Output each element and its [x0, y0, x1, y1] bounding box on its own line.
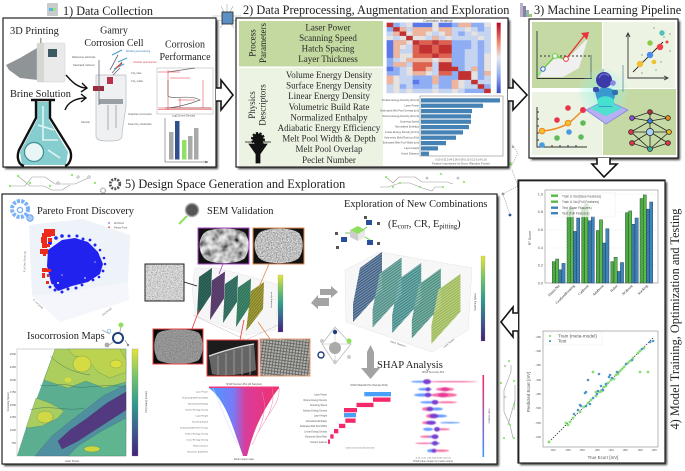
diagram: corrosion cell: Counter and counter [133, 60, 157, 64]
circuit decoration: left of panel 4 [500, 360, 515, 439]
heading 4: 4) Model Training, Optimization and Testing [668, 209, 682, 429]
axis labels: -450 [535, 392, 541, 396]
icon: pareto gear [12, 201, 33, 221]
axis labels: -350 [535, 363, 541, 367]
chart: polarisation curve: Log(Current Density) [172, 114, 195, 118]
chart: feature importance: Layer Height [404, 146, 419, 150]
heading: SHAP analysis: SHAP Analysis [377, 360, 443, 371]
heading: Isocorrosion: Isocorrosion Maps [27, 331, 105, 342]
chart: isocorrosion contour map: 2250 [10, 365, 16, 369]
label: response targets: pitting [439, 224, 458, 230]
illustration: robot on platform [579, 65, 628, 124]
block: physics descriptors: Physics [247, 91, 257, 119]
chart: SHAP waterfall plot: Surface Energy Density [303, 409, 328, 412]
heading 2: 2) Data Preprocessing, Augmentation and Exploration [243, 3, 509, 17]
chart: central 3D design slices [192, 268, 283, 340]
arrow: printing to cell [66, 75, 87, 92]
chart: SHAP decision plot: Surface Energy Density [185, 432, 209, 436]
chart: SHAP decision plot: Laser Power [196, 390, 208, 394]
axis labels: -350 [622, 448, 628, 452]
heading 5: 5) Design Space Generation and Exploration [125, 177, 345, 191]
chart: SHAP decision plot: Model output value [234, 458, 255, 461]
label: corrosion performance: Corrosion [165, 40, 205, 50]
chart: isocorrosion contour map [6, 349, 148, 463]
chart: isocorrosion contour map: 750 [11, 441, 16, 445]
chart: SHAP decision plot: Volumetric Build Rate [187, 450, 209, 454]
chart: SHAP waterfall plot: Volume Energy Density [303, 399, 328, 402]
icon: data sheet [47, 3, 58, 16]
chart: SHAP waterfall plot [300, 384, 391, 450]
axis labels: AdaBoost [592, 284, 605, 297]
chart: SHAP decision plot: Normalized Enthalpy [188, 402, 209, 406]
chart: isocorrosion contour map: CR [mmpy] (mean) [144, 391, 148, 413]
icon: magnifier [179, 204, 198, 224]
legend: Train & Val (Base Features) [562, 194, 601, 198]
axis labels: Predicted Ecorr [mV] [526, 372, 531, 412]
chart: SHAP decision plot: Hatch Distance [193, 444, 209, 448]
chart: performance bars [165, 118, 208, 163]
legend: Test (Base Features) [562, 206, 592, 210]
arrow: brine to cell [65, 94, 86, 110]
axis labels: -600 [535, 435, 541, 439]
label: response targets: corr [398, 224, 409, 230]
label: response targets: , CR, E [409, 219, 439, 230]
chart: feature importance: Hatch Distance [401, 151, 420, 155]
chart: SHAP beeswarm plot: SHAP Summary Plot [422, 371, 444, 374]
chart: SHAP decision plot: Linear Energy Density [186, 438, 209, 442]
diagram: corrosion cell: Dual CO₂ inlet/outlet [128, 122, 152, 126]
diagram: corrosion cell [72, 49, 157, 141]
SEM image: red centre [207, 340, 258, 376]
axis labels: -450 [594, 448, 600, 452]
chart: isocorrosion contour map: 1500 [10, 403, 16, 407]
chart: exploration 3D slices: Scanning Speed [474, 293, 477, 311]
diagram: corrosion cell: Sample [81, 120, 90, 124]
chart: exploration 3D slices [345, 252, 485, 352]
quadrant: regression curve [532, 92, 602, 155]
circuit decoration: constellation above panel 4 [499, 145, 519, 216]
arrow: panel 4 to panel 5 [501, 307, 518, 337]
chart: SHAP waterfall plot: Normalized Enthalpy [306, 420, 328, 423]
block: physics descriptors: Melt Pool Overlap [296, 144, 363, 154]
SEM image: orange top [253, 228, 304, 264]
SEM image: red left [153, 329, 203, 364]
chart: SHAP waterfall plot: Scanning Speed [310, 405, 328, 407]
chart: SHAP beeswarm plot: Feature value [488, 408, 491, 423]
chart: SHAP decision plot: Volume Energy Density [185, 408, 209, 412]
chart: isocorrosion contour map: 2500 [10, 352, 16, 356]
chart: SHAP beeswarm plot: -0.15 -0.10 -0.05 0.00 0.05 0.10 0.15 [415, 458, 452, 460]
icon: connected cubes [335, 216, 380, 249]
axis labels: -550 [535, 421, 541, 425]
chart: isocorrosion contour map: 2000 [10, 378, 16, 382]
arrow: panel 1 to panel 2 [216, 80, 233, 110]
chart: feature importance: Volume Energy Density [J/mm3] [382, 114, 419, 118]
label: brine solution: Brine Solution [10, 89, 72, 100]
chart: SHAP decision plot: Scanning Speed [192, 422, 209, 424]
block: physics descriptors: Peclet Number [302, 155, 356, 165]
block: physics descriptors: Linear Energy Density [288, 91, 370, 101]
circuit decoration: right of heading 5 [380, 173, 465, 191]
block: process parameters: Hatch Spacing [302, 44, 355, 54]
block: process parameters: Parameters [258, 23, 268, 63]
axis labels: Stacking [637, 284, 649, 296]
panel 4: model training [518, 180, 667, 465]
chart: SHAP decision plot: Estimated Melt Pool Overlap [180, 426, 209, 430]
block: process parameters: Laser Power [305, 22, 351, 32]
chart: feature importance: Normalized Enthalpy [395, 125, 420, 129]
axis labels: 0.6 [538, 228, 543, 232]
block: physics descriptors: Descriptors [258, 84, 268, 126]
diagram: corrosion cell: Reference electrode [72, 55, 96, 59]
chart: feature importance: Estimated Melt Pool Overlap [um] [380, 109, 419, 113]
block: physics descriptors [239, 68, 383, 166]
image: printer machine [37, 38, 65, 82]
chart: feature importance: 0.00 0.02 0.04 0.06 0.08 0.10 0.12 0.14 0.16 [435, 158, 487, 162]
legend: Train & Val (Full Features) [562, 200, 599, 204]
chart: feature importance: Laser Power [404, 103, 419, 107]
quadrant: optimisation chart [532, 22, 602, 88]
axis labels: -500 [535, 406, 541, 410]
axis labels: 0.4 [538, 246, 543, 250]
heading 3: 3) Machine Learning Pipeline [534, 3, 682, 17]
arrow: down to SHAP plots [361, 345, 380, 379]
heading 1: 1) Data Collection [63, 4, 153, 18]
icon: molecule network [318, 327, 352, 364]
panel 1: data collection [3, 18, 218, 169]
axis labels: GradientBoosting [555, 284, 576, 305]
axis labels: -600 [550, 448, 556, 452]
heading: exploration: Exploration of New Combinations [344, 199, 487, 210]
diagram: corrosion cell: Graphite rod counter [128, 112, 152, 116]
chart: SHAP waterfall plot: Estimated Melt Pool Width [300, 425, 328, 428]
block: process parameters: Process [248, 29, 258, 57]
diagram: corrosion cell: CO₂ inlet [131, 71, 142, 75]
circuit decoration: left of heading 5 [9, 174, 96, 190]
label: response targets: ) [457, 219, 461, 230]
chart: SHAP waterfall plot: Laser Power [314, 394, 327, 396]
heatmap colour bar [497, 23, 501, 93]
arrow: panel 2 to panel 3 [508, 80, 527, 110]
chart: R2 score bars [528, 190, 658, 305]
axis labels: -300 [637, 448, 643, 452]
chart: feature importance: Scanning Speed [400, 119, 420, 123]
axis labels: 0.0 [538, 282, 543, 286]
legend: Train (meta-model) [558, 334, 597, 339]
axis labels: ElasticNet [547, 284, 561, 297]
legend [550, 193, 615, 217]
axis labels: -400 [608, 448, 614, 452]
legend: Test [558, 339, 567, 344]
chart: isocorrosion contour map: 1750 [10, 390, 16, 394]
colour bar [278, 275, 283, 332]
label: 3D printing: 3D Printing [10, 26, 59, 37]
axis labels: R² Score [528, 231, 532, 245]
colour bar [482, 375, 484, 457]
chart: SHAP waterfall plot: Linear Energy Density [304, 430, 328, 433]
axis labels: -500 [579, 448, 585, 452]
SEM image: black frame [145, 264, 184, 301]
chart: SHAP waterfall plot: SHAP Waterfall Plot (Sample #100) [350, 384, 388, 387]
chart: central 3D design slices: Scanning Speed [271, 291, 273, 308]
chart: SHAP beeswarm plot [411, 371, 491, 463]
SEM leader lines [184, 264, 270, 340]
SEM image: purple [198, 228, 249, 264]
chart: feature importance: Estimated Melt Pool Width [um] [383, 141, 419, 145]
chart: SHAP decision plot: Estimated Melt Pool Width [182, 396, 209, 400]
panel 5: design space [2, 194, 499, 466]
arrow: panel 3 to panel 4 [592, 158, 617, 177]
diagram: corrosion cell: CO₂ outlet [131, 79, 143, 83]
axis labels: CatBoost [577, 284, 590, 296]
legend: Test (Full Features) [562, 212, 589, 216]
chart: SHAP decision plot [180, 383, 279, 461]
heading: SEM validation: SEM Validation [207, 206, 274, 217]
chart: SHAP decision plot: Layer Height [196, 414, 208, 418]
label: response targets: (E [388, 219, 398, 230]
chart: isocorrosion contour map: 1250 [10, 415, 16, 419]
icon: brine flask [18, 100, 71, 166]
axis labels [528, 192, 649, 305]
panel 3: machine learning pipeline [529, 19, 680, 160]
chart: 3D Pareto scatter: CR [mm/y] [102, 307, 113, 317]
diagram: corrosion cell: Saturated Calomel [73, 63, 95, 67]
block: process parameters: Layer Thickness [298, 54, 358, 64]
quadrant: scatter correlation [603, 22, 675, 88]
icon: settings gears [101, 179, 120, 193]
chart: 3D Pareto scatter: E_pit (vs. Ecorr) [V] [23, 251, 27, 272]
icon: gear funnel [245, 134, 271, 163]
icon: processor chip [212, 4, 241, 28]
block: physics descriptors: Volumetric Build Rate [289, 102, 369, 112]
axis labels: Huber [610, 283, 619, 293]
legend: All Points [114, 222, 125, 225]
chart: parity scatter [526, 331, 658, 460]
chart: SHAP decision plot: SHAP Decision Plot (All Samples) [226, 383, 262, 386]
chart: feature importance: Surface Energy Density [J/mm2] [382, 98, 419, 102]
label: Gamry corrosion cell: Gamry [100, 26, 128, 36]
label: corrosion performance: Performance [159, 52, 211, 63]
SEM image: orange bottom [260, 339, 310, 376]
arrows: exchange between charts [311, 286, 338, 309]
block: physics descriptors: Adiabatic Energy Efficiency [278, 123, 381, 133]
chart: SHAP waterfall plot: Custom features [310, 441, 328, 444]
block: physics descriptors: Volume Energy Density [286, 70, 373, 80]
chart: isocorrosion contour map: Scanning Speed [6, 392, 10, 412]
axis labels: NGBoost [621, 284, 634, 296]
axis labels: -550 [565, 448, 571, 452]
chart: correlation heatmap: Correlation Heatmap [423, 19, 453, 23]
chart: correlation heatmap [387, 19, 501, 93]
chart: exploration 3D slices: Laser Power [443, 338, 455, 349]
block: physics descriptors: Melt Pool Width & Depth [282, 134, 376, 144]
axis labels: -300 [535, 349, 541, 353]
chart: exploration 3D slices: Hatch Distance [390, 340, 407, 348]
chart: SHAP waterfall plot: Volumetric Build Rate [305, 436, 328, 438]
legend: Pareto Front [114, 226, 128, 230]
chart: SHAP beeswarm plot: SHAP value (impact on model output) [413, 460, 453, 463]
colour bar [132, 349, 138, 456]
colour bar [481, 256, 485, 341]
block: physics descriptors: Normalized Enthalpy [290, 112, 368, 122]
chart: feature importance: Feature Importance for Ecorr (Random Forest) [432, 162, 490, 166]
axis labels [526, 335, 657, 460]
chart: SHAP waterfall plot: 0.00 0.01 0.02 0.03 0.04 0.05 [346, 448, 375, 450]
axis labels: -400 [535, 378, 541, 382]
quadrant: neural network [603, 89, 676, 155]
chart: isocorrosion contour map: 1000 [10, 428, 16, 432]
legend [108, 222, 128, 230]
chart: SHAP waterfall plot: Layer Height [314, 414, 327, 418]
label: Gamry corrosion cell: Corrosion Cell [84, 38, 144, 49]
axis labels: True Ecorr [mV] [588, 455, 618, 460]
icon: network node [102, 322, 129, 347]
chart hatch overlay [552, 198, 650, 283]
axis labels: 0.2 [538, 264, 543, 268]
axis labels: 1.0 [538, 192, 543, 196]
legend [545, 332, 602, 345]
panel 2: preprocessing [236, 18, 510, 169]
heading: Pareto: Pareto Front Discovery [37, 206, 135, 217]
image: metal powder [6, 48, 38, 80]
axis labels: -250 [651, 448, 657, 452]
block: physics descriptors: Surface Energy Density [286, 81, 372, 91]
chart: feature importance: Volumetric Build Rate [cm3/hr] [384, 135, 419, 139]
chart: polarisation curve [157, 68, 213, 118]
chart: feature importance [380, 96, 503, 166]
chart: feature importance: Linear Energy Density [J/mm] [385, 130, 419, 134]
block: process parameters: Scanning Speed [299, 33, 357, 43]
block: process parameters [239, 21, 383, 66]
chart: 3D Pareto scatter [23, 219, 130, 322]
axis labels: 0.8 [538, 210, 543, 214]
axis labels: -250 [535, 335, 541, 339]
diagram: corrosion cell: Working and working [126, 49, 151, 53]
icon: pixel data column [520, 3, 532, 17]
chart: isocorrosion contour map: Laser Power [65, 459, 79, 463]
chart: 3D Pareto scatter: E_corr [mV] [32, 299, 44, 310]
